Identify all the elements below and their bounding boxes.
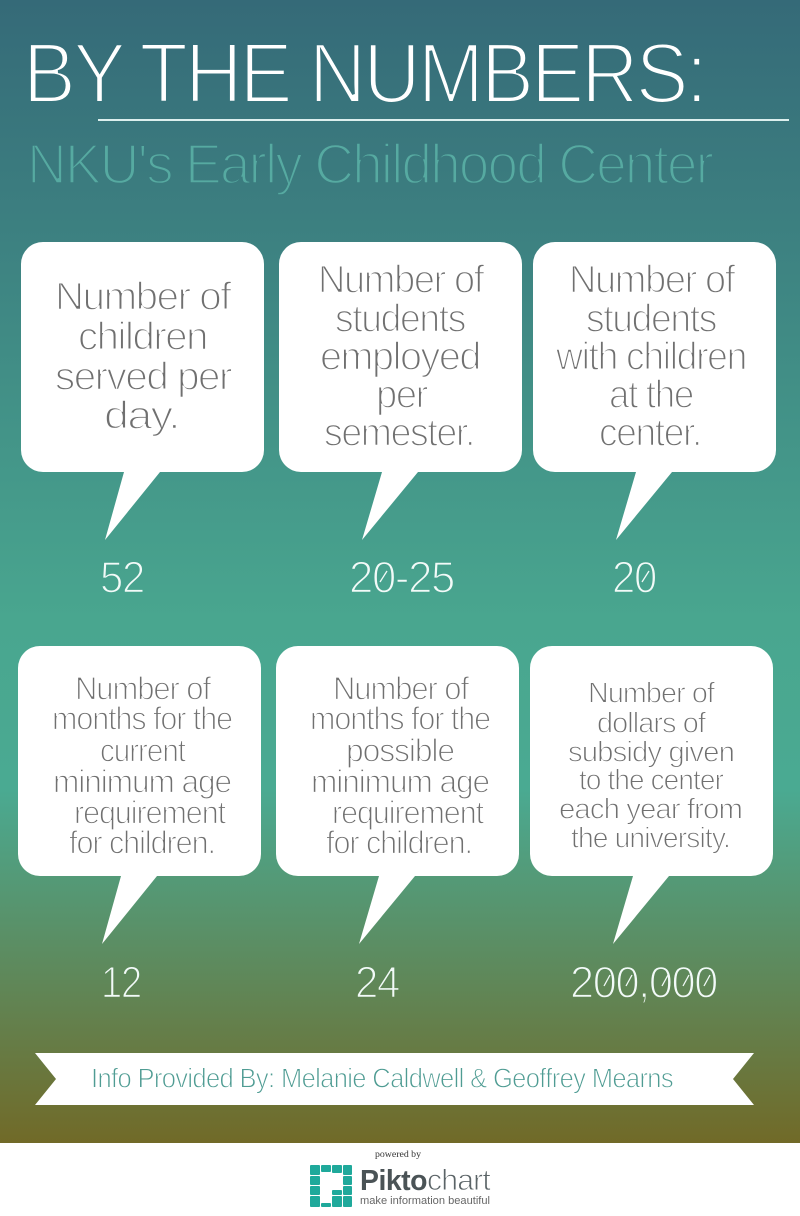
panel: children served per day: [21, 242, 264, 602]
bubble 4 text: requirement: [74, 794, 226, 830]
bubble 1 text: children: [78, 315, 207, 358]
bubble 3 text: with children: [555, 335, 746, 378]
bubble 6 text: Number of: [588, 678, 716, 710]
icon: Piktochart logo: [310, 1165, 352, 1207]
panel: university subsidy: [530, 646, 773, 1007]
panel: possible minimum age: [276, 646, 519, 1007]
speech bubble 2: [279, 242, 522, 540]
bubble 2 text: Number of: [318, 258, 485, 301]
bubble 3 text: at the: [609, 373, 693, 416]
bubble 6 text: subsidy given: [568, 736, 734, 768]
bubble 1 text: day.: [104, 394, 179, 437]
ribbon shape: [35, 1053, 754, 1105]
bubble 5 text: minimum age: [311, 764, 489, 800]
bubble 5 text: Number of: [333, 670, 469, 706]
bubble 1 text: served per: [55, 355, 232, 398]
speech bubble 6: [530, 646, 773, 944]
panel: students with children at the center: [533, 242, 776, 602]
panel: students employed per semester: [279, 242, 522, 602]
bubble 4 text: months for the: [52, 700, 232, 736]
bubble 3 text: [555, 258, 746, 454]
number: 24: 24: [355, 958, 400, 1007]
bubble 2 text: employed: [320, 335, 480, 378]
wordmark: Piktochart: Pikto: [360, 1165, 427, 1197]
bubble 3 text: students: [586, 297, 717, 340]
panel: current minimum age: [18, 646, 261, 1007]
speech bubble 4: [18, 646, 261, 944]
bubble 4 text: minimum age: [53, 764, 231, 800]
bubble 5 text: requirement: [332, 794, 484, 830]
bubble 1 text: [55, 275, 232, 437]
bubble 4 text: for children.: [69, 824, 215, 860]
wordmark: Piktochart: chart: [427, 1164, 491, 1197]
number: 200,000: 200,000: [570, 958, 718, 1007]
speech bubble 5: [276, 646, 519, 944]
bubble 5 text: for children.: [326, 824, 472, 860]
title rule: [98, 119, 789, 121]
bubble 2 text: [318, 258, 485, 454]
bubble 5 text: months for the: [310, 700, 490, 736]
bubble 4 text: current: [100, 732, 186, 768]
bubble 4 text: [52, 670, 232, 860]
powered by label: powered by: [375, 1149, 422, 1159]
credits text: Info Provided By: Melanie Caldwell & Geoffrey Mearns: [91, 1062, 673, 1093]
bubble 2 text: students: [335, 297, 466, 340]
bubble 1 text: Number of: [55, 275, 232, 318]
bubble 6 text: to the center: [579, 764, 724, 796]
bubble 6 text: each year from: [559, 794, 742, 826]
bubble 6 text: dollars of: [597, 708, 707, 740]
number: 52: 52: [100, 553, 144, 602]
bubble 3 text: center.: [599, 411, 701, 454]
number: 20-25: 20-25: [349, 553, 454, 602]
bubble 3 text: Number of: [569, 258, 736, 301]
banner: info credits: [35, 1053, 754, 1105]
number: 12: 12: [101, 958, 141, 1007]
title: BY THE NUMBERS:: [23, 26, 705, 122]
wordmark: Piktochart: [360, 1164, 491, 1197]
speech bubble 3: [533, 242, 776, 540]
bubble 6 text: the university.: [571, 822, 730, 854]
bubble 6 text: [559, 678, 742, 854]
bubble 4 text: Number of: [75, 670, 211, 706]
bubble 2 text: semester.: [324, 411, 474, 454]
number: 20: 20: [612, 553, 657, 602]
footer: white strip: [0, 1143, 800, 1216]
speech bubble 1: [21, 242, 264, 540]
bubble 2 text: per: [376, 373, 428, 416]
tagline: make information beautiful: [360, 1195, 490, 1207]
subtitle: NKU's Early Childhood Center: [27, 132, 714, 196]
bubble 5 text: possible: [346, 732, 454, 768]
bubble 5 text: [310, 670, 490, 860]
